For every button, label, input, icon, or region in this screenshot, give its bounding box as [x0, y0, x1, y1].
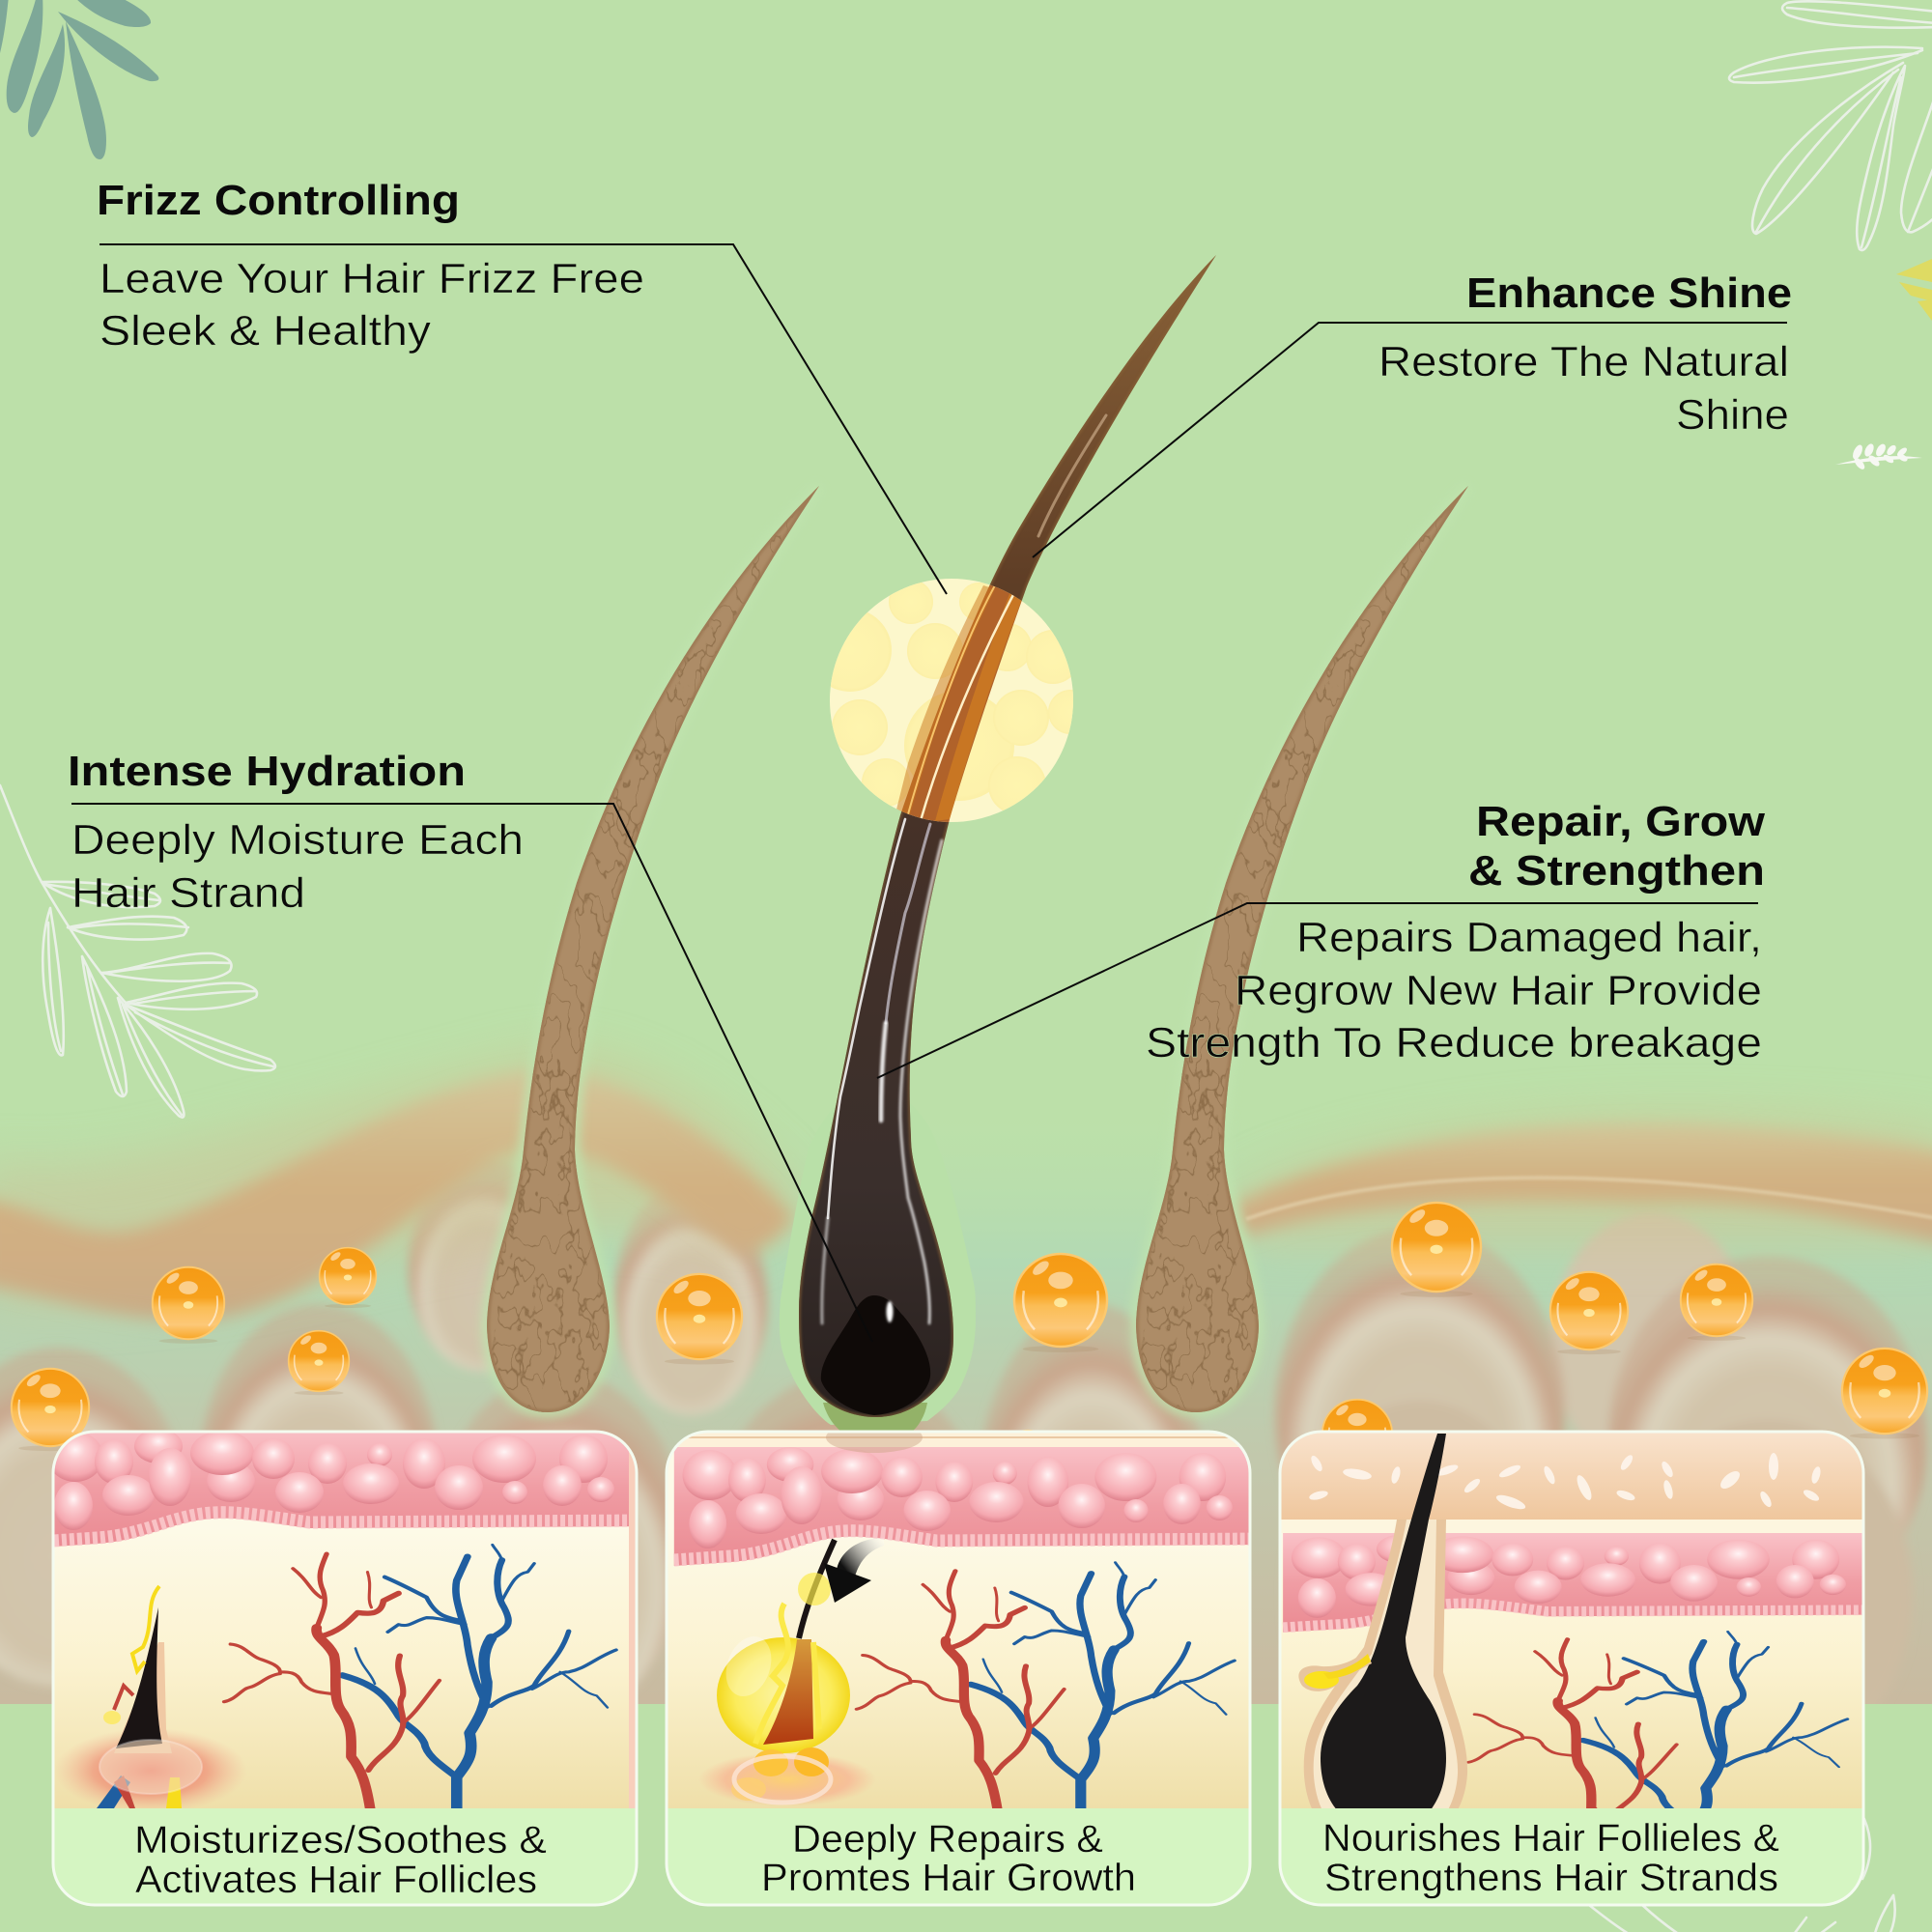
card: deeply repairs — [666, 1422, 1266, 1906]
icon: yellow leaf fragment at right edge — [1896, 259, 1932, 321]
icon: white outline leaves bottom right — [1589, 1811, 1895, 1932]
caption: nourishes: Nourishes Hair Follieles & — [1322, 1817, 1779, 1860]
leader line: frizz — [99, 244, 947, 594]
callout: enhance shine — [1033, 270, 1792, 557]
text: shine description: Restore The Natural — [1378, 338, 1789, 385]
card: nourishes follicles — [1279, 1430, 1880, 1906]
heading: enhance shine: Enhance Shine — [1466, 270, 1792, 317]
callout: intense hydration — [68, 748, 872, 1342]
icon: small white wheat sprig — [1835, 442, 1922, 471]
caption: moisturizes — [134, 1819, 547, 1901]
text: repair description: Strength To Reduce breakage — [1146, 1019, 1762, 1066]
icon: yellow capsule follicle — [698, 1540, 876, 1806]
leader line: hydration — [71, 804, 872, 1342]
leader line: repair — [877, 903, 1758, 1078]
icon: white outline leaves top right — [1729, 1, 1932, 250]
heading: repair grow strengthen: & Strengthen — [1468, 847, 1765, 895]
green glow around central hair bulb — [780, 1082, 976, 1445]
text: shine description — [1378, 338, 1789, 439]
caption: deeply repairs: Promtes Hair Growth — [761, 1857, 1136, 1899]
text: frizz description: Sleek & Healthy — [99, 307, 431, 355]
leader line: shine — [1033, 323, 1787, 557]
text: repair description: Repairs Damaged hair, — [1296, 914, 1762, 961]
callout: repair grow strengthen — [877, 798, 1766, 1078]
text: frizz description — [99, 255, 644, 355]
text: shine description: Shine — [1676, 391, 1789, 439]
caption: deeply repairs: Deeply Repairs & — [792, 1818, 1103, 1861]
text: repair description: Regrow New Hair Provide — [1235, 967, 1762, 1014]
heading: intense hydration: Intense Hydration — [68, 748, 466, 795]
callout: frizz controlling — [97, 177, 947, 594]
text: repair description — [1146, 914, 1762, 1066]
left brown hair — [473, 483, 831, 1420]
oil droplet circle on hair — [830, 579, 1073, 822]
caption: nourishes: Strengthens Hair Strands — [1324, 1857, 1778, 1899]
caption: moisturizes: Moisturizes/Soothes & — [134, 1819, 547, 1861]
icon: small follicle with red glow — [54, 1586, 247, 1813]
heading: repair grow strengthen — [1468, 798, 1766, 895]
skin flecks — [1308, 1453, 1822, 1512]
caption: moisturizes: Activates Hair Follicles — [135, 1859, 537, 1901]
text: frizz description: Leave Your Hair Frizz Free — [99, 255, 644, 302]
arrow: black arrow pointing to follicle — [824, 1538, 884, 1603]
icon: white outline branch left — [0, 785, 275, 1118]
text: hydration description — [71, 816, 524, 917]
icon: black hair follicle with sheath — [1298, 1434, 1467, 1816]
heading: frizz controlling: Frizz Controlling — [97, 177, 460, 224]
text: hydration description: Hair Strand — [71, 869, 305, 917]
caption: deeply repairs — [761, 1818, 1136, 1899]
icon: teal leaves top left — [0, 0, 158, 159]
icon: oil capsules — [12, 1203, 1927, 1480]
heading: repair grow strengthen: Repair, Grow — [1476, 798, 1766, 845]
text: hydration description: Deeply Moisture Each — [71, 816, 524, 864]
background: blurred scalp waves and arches — [0, 1057, 1932, 1704]
central dark hair — [799, 255, 1216, 1417]
right brown hair — [1122, 483, 1480, 1420]
card: moisturizes and soothes — [39, 1420, 649, 1906]
caption: nourishes — [1322, 1817, 1779, 1899]
